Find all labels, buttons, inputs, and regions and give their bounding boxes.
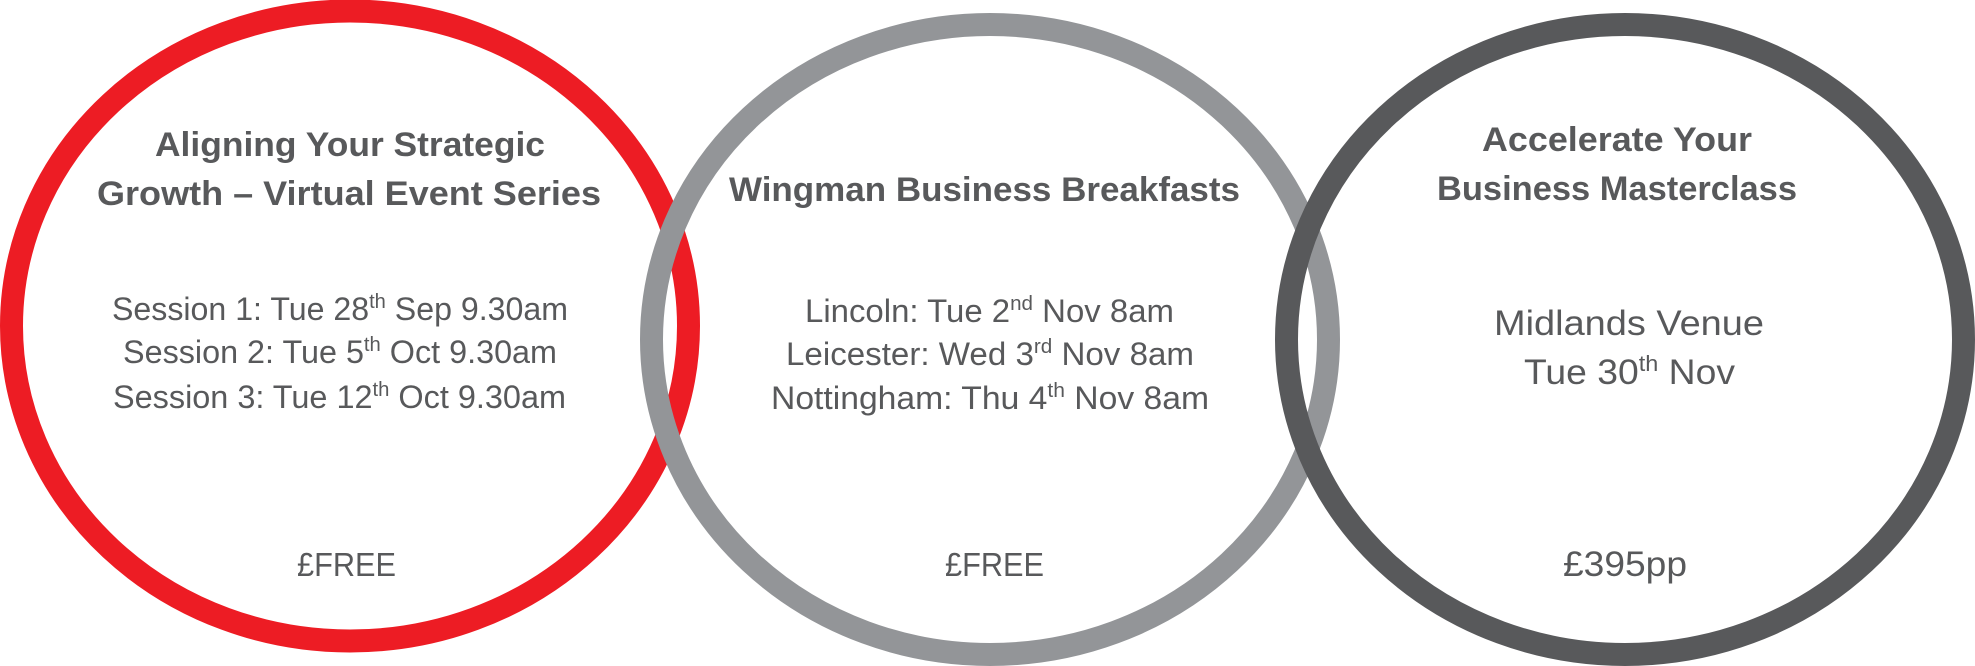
text: session dates: Session 3: Tue 12 — [113, 379, 369, 415]
text: breakfast dates: Nottingham: Thu 4 — [771, 380, 1034, 416]
text: venue and date: th — [1639, 351, 1658, 376]
text: session dates: Session 2: Tue 5 — [123, 334, 361, 370]
text: breakfast dates: th — [1047, 380, 1065, 402]
heading: accelerate your business masterclass — [1437, 121, 1797, 208]
text: session dates — [112, 291, 568, 415]
heading: aligning your strategic growth: Aligning Your Strategic — [155, 126, 545, 164]
text: session dates: th — [369, 291, 386, 313]
heading: aligning your strategic growth: Growth – Virtual Event Series — [97, 175, 601, 213]
text: session dates: th — [373, 379, 389, 401]
text: session dates: Sep 9.30am — [386, 291, 568, 327]
ring: dark grey — [1286, 24, 1964, 654]
heading: aligning your strategic growth — [97, 126, 601, 213]
text: breakfast dates: nd — [1010, 293, 1033, 315]
text: venue and date: Midlands Venue — [1494, 304, 1764, 343]
text: breakfast dates: Nov 8am — [1065, 380, 1209, 416]
text: venue and date: Nov — [1658, 353, 1736, 392]
ring: red — [12, 11, 688, 641]
price: free: £FREE — [297, 546, 396, 583]
text: breakfast dates — [771, 293, 1209, 416]
heading: accelerate your business masterclass: Accelerate Your — [1482, 121, 1752, 159]
text: breakfast dates: Lincoln: Tue 2 — [805, 293, 1004, 329]
text: session dates: Oct 9.30am — [381, 334, 557, 370]
text: session dates: Session 1: Tue 28 — [112, 291, 368, 327]
text: breakfast dates: rd — [1034, 336, 1052, 358]
text: session dates: th — [364, 334, 381, 356]
ring: grey — [652, 24, 1328, 654]
text: session dates: Oct 9.30am — [389, 379, 566, 415]
panel: business breakfasts — [729, 171, 1240, 583]
panel: masterclass — [1437, 121, 1797, 584]
text: breakfast dates: Nov 8am — [1052, 336, 1194, 372]
heading: wingman business breakfasts: Wingman Business Breakfasts — [729, 171, 1240, 209]
panel: virtual event series — [97, 126, 601, 583]
text: venue and date — [1494, 304, 1764, 392]
heading: accelerate your business masterclass: Business Masterclass — [1437, 170, 1797, 208]
price: free: £FREE — [945, 546, 1044, 583]
text: venue and date: Tue 30 — [1524, 353, 1632, 392]
price: 395 per person: £395pp — [1563, 545, 1687, 584]
text: breakfast dates: Leicester: Wed 3 — [786, 336, 1026, 372]
text: breakfast dates: Nov 8am — [1033, 293, 1174, 329]
